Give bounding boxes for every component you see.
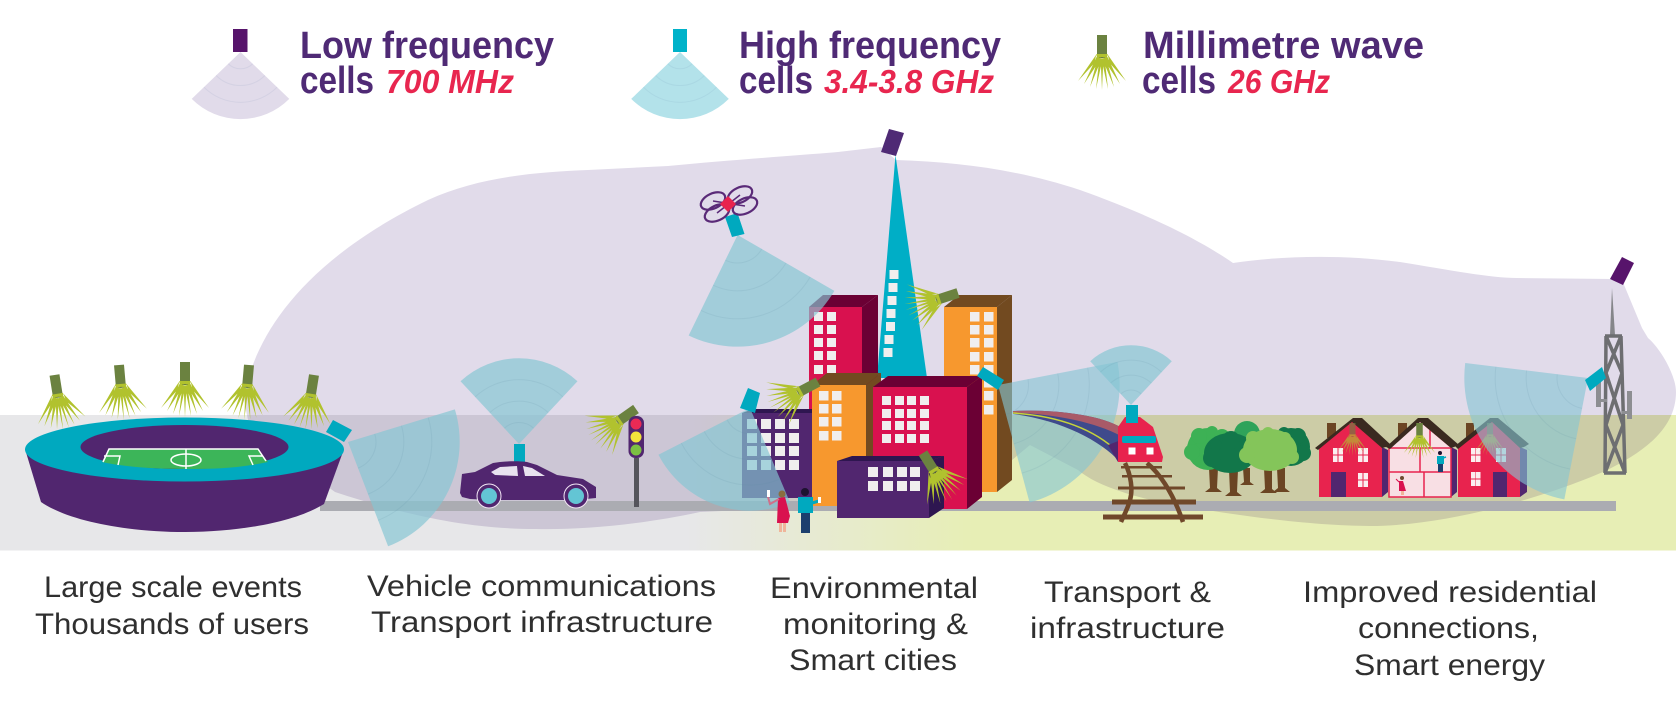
caption: large scale events: Large scale events <box>44 571 302 604</box>
person: woman <box>767 490 790 532</box>
house: middle cross-section <box>1386 418 1459 497</box>
coverage background: lilac low-frequency area <box>244 147 1676 529</box>
building: purple left <box>742 409 814 498</box>
caption: transport and infrastructure <box>1030 576 1225 645</box>
caption: environmental monitoring: Smart cities <box>789 644 957 677</box>
caption: vehicle communications: Vehicle communications <box>367 570 716 603</box>
people with phones <box>767 488 821 533</box>
building: tall red <box>809 295 878 417</box>
legend text: high frequency <box>739 25 1001 102</box>
legend text: millimetre wave: cells <box>1142 60 1216 102</box>
caption: residential connections: Smart energy <box>1354 649 1545 682</box>
train trail <box>1013 411 1122 462</box>
caption: vehicle communications: Transport infrastructure <box>371 606 713 639</box>
legend text: millimetre wave <box>1142 25 1424 102</box>
legend text: high frequency: 3.4-3.8 GHz <box>824 63 994 100</box>
train with high frequency cell <box>1013 345 1172 462</box>
residential tower with high frequency cell <box>1438 257 1638 519</box>
car beam <box>461 358 577 444</box>
traffic light with millimetre cell <box>577 389 650 507</box>
building: large red <box>873 376 982 509</box>
legend text: millimetre wave: 26 GHz <box>1227 63 1330 100</box>
house: right <box>1455 418 1529 497</box>
caption: transport and infrastructure: Transport & <box>1044 576 1211 609</box>
caption: transport and infrastructure: infrastructure <box>1030 612 1225 645</box>
legend text: low frequency: cells <box>300 60 374 102</box>
legend text: low frequency: 700 MHz <box>386 63 514 100</box>
high frequency cell on purple building <box>649 384 816 528</box>
stadium rim <box>25 418 344 482</box>
railway tracks <box>1103 463 1203 522</box>
houses <box>1315 418 1529 497</box>
tower beam <box>1438 310 1638 519</box>
train front <box>1118 417 1163 462</box>
caption: environmental monitoring: monitoring & <box>783 608 968 641</box>
stadium body <box>25 449 344 532</box>
train cell <box>1126 405 1138 423</box>
legend text: high frequency: High frequency <box>739 25 1001 67</box>
tower antennas <box>1596 378 1632 419</box>
icon: low frequency cell <box>192 29 289 119</box>
legend text: high frequency: cells <box>739 60 813 102</box>
car wheels <box>477 484 588 508</box>
stadium with millimetre wave cells <box>25 362 344 532</box>
icon: high frequency cell <box>631 29 729 119</box>
legend text: low frequency <box>300 25 554 102</box>
legend text: millimetre wave: Millimetre wave <box>1143 25 1424 67</box>
tower cell <box>1585 367 1606 391</box>
car with high frequency cell <box>460 358 596 508</box>
caption: environmental monitoring <box>770 572 978 677</box>
person: man <box>798 488 821 533</box>
caption: residential connections: Improved residential <box>1303 576 1597 609</box>
person: woman downstairs <box>1396 476 1406 495</box>
building: tall orange <box>944 295 1012 492</box>
city buildings <box>742 295 1012 518</box>
tower low frequency cell <box>1610 257 1634 285</box>
caption: large scale events <box>35 571 309 641</box>
high frequency cell on stadium <box>315 374 482 559</box>
caption: large scale events: Thousands of users <box>35 608 309 641</box>
drone body <box>698 183 760 225</box>
trees <box>1184 421 1311 496</box>
drone with high frequency cell <box>665 183 843 364</box>
icon: stadium millimetre cells <box>31 362 338 433</box>
city millimetre wave cells <box>758 270 972 512</box>
legend text: low frequency: Low frequency <box>300 25 554 67</box>
road <box>320 501 1616 511</box>
legend: high frequency <box>631 25 1001 119</box>
stadium interior <box>80 425 288 469</box>
caption: vehicle communications <box>367 570 716 639</box>
caption: residential connections: connections, <box>1358 612 1539 645</box>
caption: environmental monitoring: Environmental <box>770 572 978 605</box>
legend: millimetre wave <box>1078 25 1424 102</box>
house: left <box>1315 418 1391 497</box>
tower spire <box>1610 288 1615 335</box>
drone beam <box>665 213 843 364</box>
legend: low frequency <box>192 25 554 119</box>
drone cell <box>725 213 744 237</box>
building: low purple front <box>837 456 944 518</box>
high frequency cell on orange building <box>954 315 1145 520</box>
spire with low frequency cell <box>877 129 927 378</box>
icon: millimetre wave cell <box>1078 35 1126 90</box>
car body <box>460 461 596 500</box>
car cell <box>514 444 525 462</box>
tower lattice <box>1604 336 1626 473</box>
ground band <box>0 415 1676 550</box>
caption: residential connections <box>1303 576 1597 682</box>
train beam <box>1090 345 1172 405</box>
football pitch <box>102 449 268 469</box>
building: orange middle <box>812 373 881 506</box>
person: man upstairs <box>1437 451 1446 472</box>
